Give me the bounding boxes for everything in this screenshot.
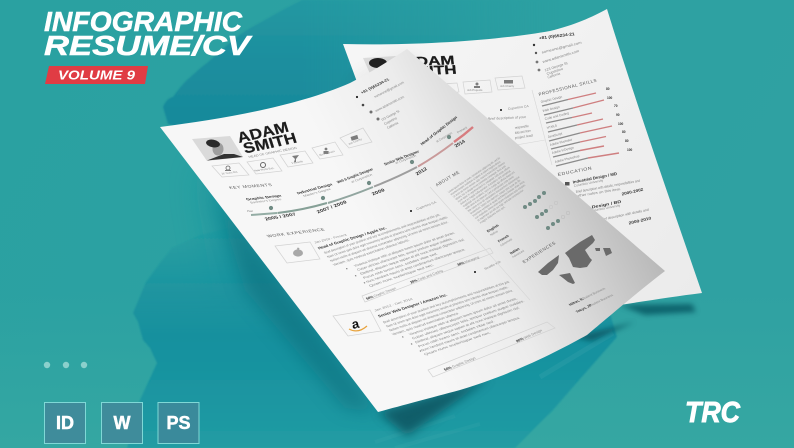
skill labels: Adobe InDesign bbox=[551, 146, 574, 155]
timeline labels: at Corporation bbox=[435, 131, 453, 143]
stat boxes: New World Exp. bbox=[253, 166, 276, 172]
icon: PS bbox=[158, 402, 199, 444]
about me paragraph: iste natus error sit voluptatem accusantium doloremque bbox=[466, 175, 521, 213]
back experience lines: Brief description of your bbox=[488, 115, 527, 121]
job 2 description: Brief description of your position and key accomplishments and responsibilities at this job. bbox=[382, 280, 511, 324]
job 1 skill tags: Code and Coding bbox=[417, 269, 444, 281]
job 1 bullets bbox=[345, 230, 475, 291]
job 1 bbox=[313, 200, 493, 302]
job 2 bbox=[373, 259, 555, 377]
back location: Cupertino CA bbox=[508, 104, 530, 111]
back contact: Cupertino bbox=[546, 67, 564, 76]
skill values: 80 bbox=[622, 130, 626, 134]
about me paragraph: eiusmod tempor incididunt ut labore et dolore magna aliqua. bbox=[449, 160, 502, 196]
job 1 skill tags: 25% bbox=[409, 278, 419, 284]
about me paragraph: irure dolor in reprehenderit in voluptate velit esse cillum bbox=[457, 165, 511, 203]
back contact: California bbox=[547, 72, 561, 79]
badge: volume 9: VOLUME 9 bbox=[58, 68, 136, 82]
timeline labels: at Corporation bbox=[350, 173, 373, 184]
languages: Advanced bbox=[511, 249, 525, 259]
timeline labels: Industrial Design bbox=[296, 182, 334, 195]
skill labels: Code and Coding bbox=[544, 111, 570, 121]
job 2 skill tags: Web Design bbox=[523, 329, 543, 340]
software icons bbox=[44, 402, 199, 444]
about me paragraph: sit aspernatur aut odit aut fugit, sed quia consequuntur bbox=[476, 189, 525, 222]
name: SMITH bbox=[241, 130, 299, 157]
education entries: Columbia University bbox=[590, 203, 621, 213]
about me paragraph bbox=[447, 156, 533, 225]
job 1 description: Nam Ut lorem quis dolor eget nonummy iaculis ut pharetra sem lobortis vitae tempus mattis. bbox=[326, 215, 449, 259]
back stat boxes bbox=[440, 76, 525, 94]
shadow: back sheet bbox=[620, 304, 696, 315]
education entries: 2000-2010 bbox=[628, 215, 653, 225]
logo: TRC: TRC bbox=[685, 397, 741, 429]
back contact: 123 George St bbox=[544, 61, 568, 72]
back stat boxes: Job Projects bbox=[467, 88, 483, 92]
job 1 description: Brief description of your position and key accomplishments and responsibilities at this job. bbox=[323, 213, 441, 255]
skill values: 100 bbox=[607, 96, 613, 100]
job 2 skill tags: 90% bbox=[515, 337, 525, 343]
job 2: Senior Web Designer / Amazon Inc. bbox=[377, 292, 448, 318]
logo box: amazon bbox=[333, 310, 381, 336]
timeline labels: 2014 bbox=[453, 139, 467, 149]
name bbox=[235, 119, 299, 159]
job 2 bullets: Quam nunc scelerisque sed nec. bbox=[423, 331, 492, 356]
timeline labels: Head of Graphic Design bbox=[419, 114, 459, 146]
icon: ID bbox=[44, 402, 86, 444]
languages: English bbox=[486, 224, 500, 233]
experience locations: Tokyo, JP bbox=[575, 303, 593, 314]
logo box: amazon: a bbox=[350, 316, 361, 332]
back contact: someone@gmail.com bbox=[541, 41, 582, 54]
back photo bbox=[363, 55, 425, 85]
job 1: Head of Graphic Design / Apple Inc. bbox=[317, 226, 387, 250]
contact block: www.adamsmith.com bbox=[374, 95, 405, 113]
experience locations: Hilton, IL bbox=[568, 297, 585, 307]
timeline labels: Senior Web Designer bbox=[383, 149, 421, 166]
title bbox=[44, 6, 253, 61]
about me paragraph: Ut enim ad minim veniam, quis nostrud exercitation ullamco bbox=[452, 161, 506, 198]
job 1 bullets: Vivamus tristique nibh ut aliquam lorem ipsum dolor sit amet donec. bbox=[353, 231, 456, 268]
skill values: 80 bbox=[625, 139, 629, 143]
education entries: Design / BD bbox=[591, 199, 622, 209]
timeline labels bbox=[245, 114, 468, 222]
languages bbox=[486, 224, 525, 259]
job 1 bullets: Cuiser ultricies ullamcorper felis, tempor pretium augue sodales. bbox=[356, 237, 453, 272]
back contact: +81 (0)65234-21 bbox=[539, 31, 576, 40]
experience locations: Student Business bbox=[581, 287, 607, 301]
education entries: other notes on this item. bbox=[577, 187, 622, 198]
name: HEAD OF GRAPHIC DESIGN bbox=[248, 146, 298, 159]
skill values: 70 bbox=[614, 104, 618, 108]
skill labels: HTML5 bbox=[546, 124, 558, 130]
job 1 bullets: Nunc hendrerit mauris sit amet condimentum ullamcorper tempus. bbox=[365, 248, 466, 284]
back name: ADAM bbox=[403, 53, 455, 69]
job 2 bullets: Eleifend, aliquam neque sapien at elit nunc tristique dignissim nisl. bbox=[414, 306, 521, 344]
skill labels: Adobe Illustrator bbox=[549, 137, 574, 147]
back experience lines: project lead bbox=[515, 134, 533, 140]
timeline labels: Web & Graphic Designer bbox=[336, 167, 374, 184]
title: RESUME/CV bbox=[44, 30, 253, 61]
education entries: Industrial Design / MD bbox=[572, 171, 617, 184]
education entries: Brief description with details, responsibilities and bbox=[575, 179, 640, 194]
icon: ID: ID bbox=[56, 413, 74, 433]
badge: volume 9 bbox=[45, 66, 148, 84]
job 2 description: Nam Ut lorem quis dolor eget nonummy iaculis ut pharetra sem lobortis vitae tempus mattis. bbox=[385, 285, 509, 328]
contact block: Cupertino bbox=[383, 116, 398, 126]
skill bars bbox=[542, 93, 619, 166]
contact block: California bbox=[386, 121, 399, 130]
job 2: Seattle WA bbox=[483, 259, 503, 271]
skill values: 100 bbox=[627, 148, 633, 152]
panel: front resume sheet bbox=[160, 49, 665, 412]
job 1: Jan 2010 - Present bbox=[313, 233, 348, 244]
skill values: 100 bbox=[618, 122, 624, 126]
skill labels: Graphic Design bbox=[540, 95, 563, 104]
timeline labels: Graphic Design bbox=[245, 193, 283, 201]
about me paragraph: cupidatat non proident, sunt in culpa qui officia deserunt bbox=[461, 170, 516, 208]
job 2: Jan 2012 - Dec 2014 bbox=[373, 297, 414, 312]
skill values: 80 bbox=[606, 87, 610, 91]
pagination dots bbox=[44, 362, 87, 368]
experience locations: Student Business bbox=[589, 293, 614, 307]
skill labels: JavaScript bbox=[547, 131, 563, 139]
stat boxes: Job Charity bbox=[347, 137, 363, 146]
about me paragraph: magni dolores eos qui. bbox=[479, 205, 506, 225]
heading: experiences: EXPERIENCES bbox=[521, 240, 557, 264]
contact block bbox=[356, 78, 405, 130]
job 1: Cupertino CA bbox=[415, 200, 438, 211]
timeline labels: Master's Degree bbox=[302, 187, 332, 198]
about me paragraph: inventore veritatis et quasi architecto beatae vitae dicta bbox=[471, 180, 526, 217]
job 1 bullets: Quam nunc scelerisque sed nec. bbox=[368, 263, 435, 288]
job 2 bullets: Vivamus tristique nibh ut aliquam lorem ipsum dolor sit amet donec. bbox=[408, 297, 519, 336]
skill labels: Web Design bbox=[542, 105, 560, 113]
back experience lines: responsible bbox=[515, 124, 529, 130]
photo bbox=[192, 136, 243, 161]
about me paragraph: laboris nisi ut aliquip ex ea commodo consequat. Duis aute bbox=[454, 164, 507, 201]
job 1 skill tags: Managing bbox=[464, 255, 480, 264]
icon: PS: PS bbox=[166, 413, 191, 433]
job 2 description: Nullam mollis ut aliquam vel dictumst consectetur adipiscing. Ut enim ad minim veniam dolor. bbox=[388, 289, 514, 332]
timeline labels: 2009 bbox=[371, 188, 387, 197]
languages: Italian bbox=[509, 247, 521, 255]
skill labels: Adobe Photoshop bbox=[554, 154, 580, 164]
job 2 bullets: Purus nibh lorem sem, sodales vitae sed. bbox=[417, 319, 495, 348]
job 1 bullets: Purus nibh lorem sem, sodales vitae sed. bbox=[362, 252, 439, 280]
job 2 skill tags bbox=[428, 322, 555, 377]
title: INFOGRAPHIC bbox=[44, 6, 243, 37]
stat boxes: Bio Products bbox=[318, 149, 336, 157]
back stat boxes: Job Charity bbox=[500, 84, 515, 88]
experience locations bbox=[568, 287, 614, 314]
languages: French bbox=[497, 234, 510, 243]
timeline labels: 2012 bbox=[415, 166, 429, 177]
about me paragraph: Lorem ipsum dolor sit amet, consectetur adipiscing elit, sed do bbox=[447, 156, 501, 194]
contact block: someone@gmail.com bbox=[373, 81, 405, 99]
job 2 bullets: Nunc hendrerit mauris sit amet condimentum ullamcorper tempus. bbox=[420, 316, 521, 352]
stat boxes: 26 Years Old bbox=[220, 170, 239, 175]
name: ADAM bbox=[235, 119, 291, 147]
timeline labels: Bachelor's Degree bbox=[249, 198, 283, 204]
heading: education: EDUCATION bbox=[557, 165, 593, 177]
job 1 description: Veniam, quis nostrud exercitation ullamco laboris. bbox=[332, 238, 410, 267]
job 1 skill tags bbox=[362, 248, 493, 302]
education entries: 2000-2002 bbox=[621, 186, 645, 196]
job 2 bullets: Cuiser ultricies ullamcorper felis, tempor pretium augue sodales. bbox=[411, 299, 525, 340]
contact block: 123 George St bbox=[380, 110, 400, 122]
language rating dots bbox=[523, 191, 570, 230]
about me paragraph: mollit anim id est laborum. Sed ut perspiciatis unde omnis bbox=[464, 175, 515, 210]
job 2 description: Veniam, quis nostrud exercitation ullamco. bbox=[391, 311, 460, 336]
about me paragraph: laudantium, totam rem aperiam, eaque ipsa quae ab illo bbox=[469, 179, 522, 215]
timeline labels: Past bbox=[247, 209, 253, 213]
education entries: Columbia University bbox=[573, 178, 604, 188]
job 2 skill tags: 50% bbox=[443, 366, 453, 372]
job 2 skill tags: Graphic Design bbox=[451, 356, 477, 369]
skill values bbox=[606, 87, 633, 152]
job 1 skill tags: Graphic Design bbox=[373, 286, 397, 298]
stat boxes: 2 Awards bbox=[290, 160, 304, 165]
languages: Advanced bbox=[499, 237, 513, 247]
back experience lines: data and more bbox=[515, 129, 531, 135]
about me paragraph: sunt explicabo. Nemo enim ipsam voluptatem quia voluptas bbox=[474, 183, 527, 220]
contact icons bbox=[356, 96, 380, 120]
timeline labels: 2007 / 2009 bbox=[316, 200, 349, 215]
logo box: apple bbox=[275, 242, 320, 263]
about me bbox=[430, 156, 533, 300]
back contact bbox=[533, 31, 582, 79]
back name: SMITH bbox=[403, 63, 457, 78]
job 1 skill tags: 50% bbox=[365, 295, 375, 301]
icon: W bbox=[102, 402, 142, 444]
contact block: +81 (0)65234-21 bbox=[360, 78, 390, 95]
timeline bbox=[251, 127, 473, 215]
timeline labels: 2005 / 2007 bbox=[264, 212, 298, 222]
stat boxes bbox=[212, 128, 372, 177]
skill labels bbox=[540, 95, 580, 164]
heading: key moments: KEY MOMENTS bbox=[228, 183, 273, 190]
back experience lines bbox=[488, 115, 533, 140]
languages: Native bbox=[489, 229, 499, 237]
panel: back resume sheet bbox=[343, 9, 702, 308]
job 1 description: Nullam mollis ut aliquam vel dictumst consectetur adipiscing. Ut enim ad minim veniam dolor. bbox=[329, 220, 449, 263]
timeline icons bbox=[269, 135, 451, 210]
back contact: www.adamsmith.com bbox=[542, 49, 580, 64]
world map bbox=[538, 235, 612, 284]
timeline labels: at Corporation bbox=[394, 154, 417, 165]
heading: professional skills: PROFESSIONAL SKILLS bbox=[538, 78, 597, 97]
back location bbox=[500, 104, 530, 111]
about me: ABOUT ME bbox=[434, 170, 461, 187]
job 1 skill tags: 30% bbox=[456, 261, 466, 267]
education entries bbox=[565, 171, 653, 225]
education entries: Brief description with details and bbox=[599, 208, 649, 222]
about me paragraph: dolore eu fugiat nulla pariatur. Excepteur sint occaecat bbox=[459, 169, 512, 206]
heading: work experience: WORK EXPERIENCE bbox=[266, 227, 326, 238]
icon: W: W bbox=[114, 413, 130, 433]
timeline labels: Present bbox=[456, 126, 468, 134]
job 2 bullets bbox=[401, 295, 537, 359]
back name bbox=[403, 53, 457, 78]
skill values: 90 bbox=[616, 113, 620, 117]
job 1 bullets: Eleifend, aliquam neque sapien at elit nunc tristique dignissim nisl. bbox=[359, 238, 466, 276]
shadow: front sheet bbox=[215, 50, 635, 436]
